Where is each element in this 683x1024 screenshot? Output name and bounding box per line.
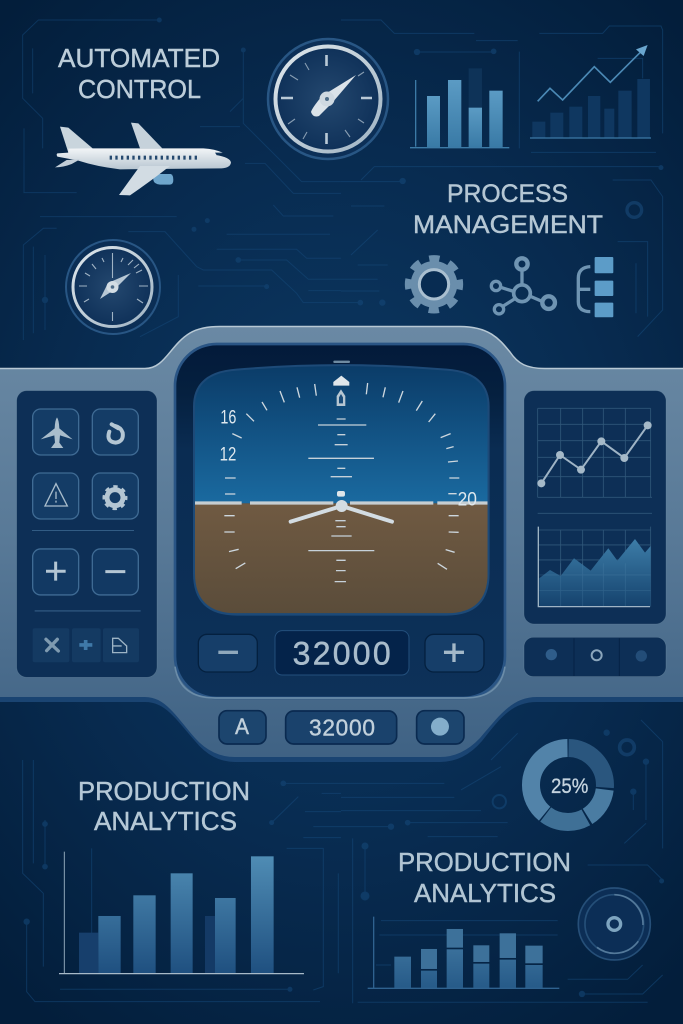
heading: process management: PROCESS (447, 180, 568, 208)
button: decrease (198, 634, 257, 672)
area chart (538, 527, 651, 607)
indicator button (417, 711, 464, 744)
bar chart: bottom left (59, 852, 304, 974)
heading: production analytics left (78, 776, 250, 836)
button: airplane (33, 409, 79, 455)
status strip (524, 637, 666, 677)
icon: network nodes (491, 258, 555, 314)
donut chart (531, 748, 605, 822)
button: hook (92, 409, 138, 455)
altitude selector (175, 631, 505, 744)
heading: production analytics right: PRODUCTION (398, 847, 571, 877)
button: warning (33, 473, 79, 519)
secondary altitude display (286, 711, 397, 744)
stacked bar chart: bottom right (368, 917, 559, 988)
heading: production analytics right: ANALYTICS (414, 878, 556, 908)
button strip (33, 628, 139, 662)
icon: hierarchy list (578, 257, 613, 317)
scale numbers: 20 (458, 490, 477, 511)
mode button A: A (235, 714, 249, 739)
line and bar chart: top right (530, 45, 651, 138)
heading: process management: MANAGEMENT (413, 211, 603, 239)
bar chart: top middle (410, 68, 509, 148)
heading: automated control: AUTOMATED (58, 43, 220, 73)
circuit pattern: bottom right (341, 720, 664, 1003)
circuit pattern: top left (23, 18, 341, 340)
heading pointer (333, 376, 349, 497)
aircraft symbol (291, 500, 392, 522)
icon: small gauge (66, 240, 160, 334)
button: plus (33, 549, 79, 595)
bezel highlight (175, 667, 505, 698)
heading: automated control: CONTROL (78, 74, 201, 104)
scale numbers: 12 (220, 445, 236, 466)
attitude indicator (193, 360, 490, 615)
altitude display: 32000 (293, 635, 391, 671)
heading: process management (413, 180, 603, 239)
scale numbers (220, 407, 477, 511)
scale numbers: 16 (220, 407, 236, 428)
circuit pattern: bottom left (23, 760, 341, 1002)
icon: large gauge (268, 39, 388, 159)
mode button A (219, 711, 266, 744)
donut chart: 25% (551, 774, 588, 798)
heading: automated control (58, 43, 220, 104)
pitch ladder (308, 419, 374, 582)
button: minus (92, 549, 138, 595)
heading: production analytics left: PRODUCTION (78, 776, 250, 806)
heading: production analytics right (398, 847, 571, 908)
icon: airplane (55, 123, 231, 195)
altitude display (275, 631, 409, 675)
button: gear (92, 473, 138, 519)
bank scale ticks (224, 383, 459, 569)
circuit pattern: top right (341, 20, 663, 337)
heading: production analytics left: ANALYTICS (94, 806, 237, 836)
button: increase (425, 634, 484, 672)
instrument frame (0, 326, 683, 762)
icon: gear (408, 258, 460, 310)
line chart (537, 408, 652, 497)
primary flight display (175, 344, 505, 698)
left control panel (17, 391, 157, 677)
right chart panel (524, 391, 666, 677)
secondary altitude display: 32000 (309, 715, 375, 741)
radial dial (578, 888, 650, 960)
